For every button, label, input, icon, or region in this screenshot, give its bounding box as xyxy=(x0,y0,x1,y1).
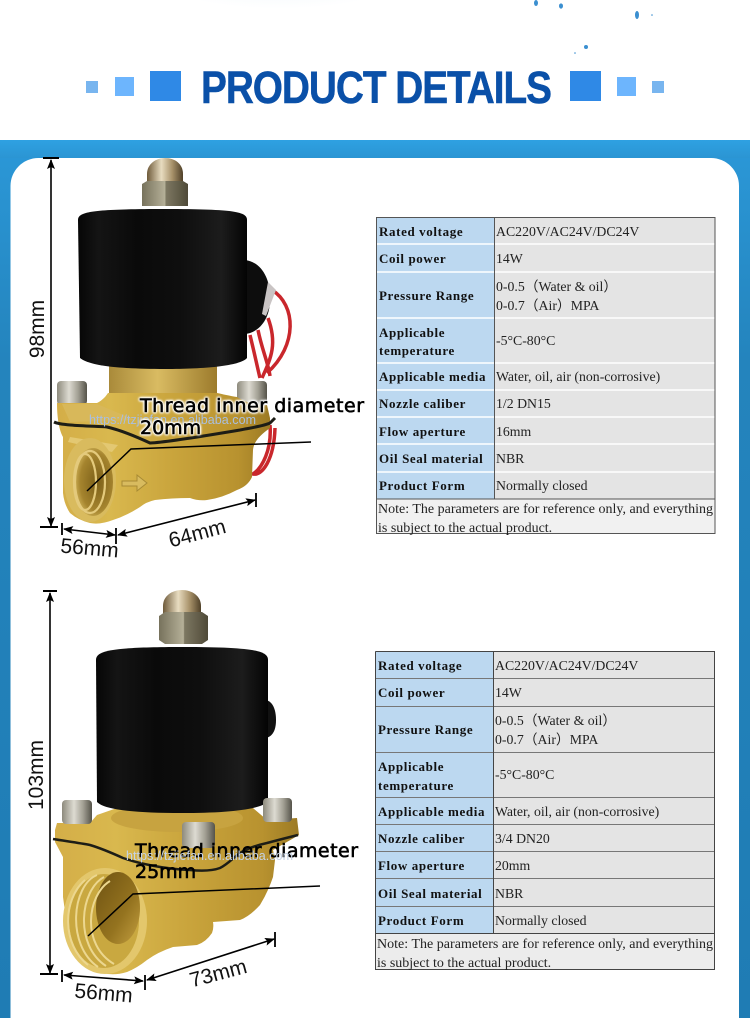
coil xyxy=(78,209,247,369)
row values: Water, oil, air (non-corrosive) xyxy=(496,369,660,385)
dimension label: 56mm: 56mm xyxy=(59,535,120,563)
water droplets xyxy=(534,0,653,54)
row lines xyxy=(375,678,715,906)
note: is subject to the actual product. xyxy=(378,521,552,536)
screws xyxy=(57,381,87,405)
row values: 16mm xyxy=(496,424,532,439)
row labels: temperature xyxy=(378,778,454,793)
row labels: Rated voltage xyxy=(379,224,463,239)
side knob xyxy=(266,700,276,738)
note xyxy=(377,937,713,971)
rubber seal xyxy=(53,835,298,871)
top casting xyxy=(111,804,243,832)
row labels: Coil power xyxy=(379,251,446,266)
row values: NBR xyxy=(495,886,524,901)
thread callout: 20mm: 20mm xyxy=(140,417,201,439)
row labels: Rated voltage xyxy=(378,658,462,673)
row labels: Nozzle caliber xyxy=(379,396,466,411)
brass neck xyxy=(109,360,217,398)
row labels xyxy=(379,224,486,493)
row labels: Product Form xyxy=(378,913,464,928)
row values: 0-0.5（Water & oil） xyxy=(496,279,617,294)
row labels: Applicable xyxy=(379,325,445,340)
spec table 1 xyxy=(376,217,715,536)
watermark: https://tzjiefan.en.alibaba.com xyxy=(126,849,293,863)
coil xyxy=(96,647,268,813)
row labels: Applicable media xyxy=(378,804,485,819)
inlet port xyxy=(64,438,116,522)
row labels: Product Form xyxy=(379,478,465,493)
boss ridge xyxy=(68,437,118,452)
spec table 2 xyxy=(375,651,715,971)
flow arrow mark xyxy=(122,475,147,491)
dimension label: 64mm: 64mm xyxy=(166,515,228,552)
dome nut xyxy=(147,158,183,184)
thread callout: 25mm xyxy=(88,840,358,936)
row values: Normally closed xyxy=(495,913,587,928)
row values: 14W xyxy=(496,251,523,266)
row values: AC220V/AC24V/DC24V xyxy=(496,224,639,239)
dimension label: 56mm: 56mm xyxy=(73,980,134,1008)
table backgrounds xyxy=(376,217,494,499)
rubber seal xyxy=(54,418,275,443)
thread callout: 20mm xyxy=(87,395,364,491)
row labels: Flow aperture xyxy=(379,424,466,439)
row labels xyxy=(378,658,485,928)
table backgrounds xyxy=(375,651,493,933)
row labels: Oil Seal material xyxy=(378,886,482,901)
dome nut xyxy=(163,590,201,616)
row labels: Oil Seal material xyxy=(379,451,483,466)
flange highlight xyxy=(62,404,135,422)
row lines xyxy=(376,244,715,472)
row values: AC220V/AC24V/DC24V xyxy=(495,658,638,673)
row labels: temperature xyxy=(379,343,455,358)
row values xyxy=(495,658,659,928)
row values: NBR xyxy=(496,451,525,466)
row values: 14W xyxy=(495,685,522,700)
row values: Water, oil, air (non-corrosive) xyxy=(495,804,659,820)
row labels: Nozzle caliber xyxy=(378,831,465,846)
note: Note: The parameters are for reference only, and everything xyxy=(377,937,713,952)
dimension label: 98mm: 98mm xyxy=(26,300,49,358)
product photo 1: small valve xyxy=(54,158,290,524)
brass body xyxy=(55,808,299,974)
icon: red wires xyxy=(250,290,290,474)
watermark: https://tzjiefan.en.alibaba.com xyxy=(89,413,256,427)
note xyxy=(378,502,713,536)
row labels: Coil power xyxy=(378,685,445,700)
dimension lines: large valve xyxy=(40,591,275,990)
thread callout: 25mm: 25mm xyxy=(135,861,196,883)
dimension label: 103mm: 103mm xyxy=(25,740,48,810)
row values: 0-0.5（Water & oil） xyxy=(495,713,616,728)
side connector xyxy=(245,260,270,334)
row labels: Pressure Range xyxy=(378,722,473,737)
row values xyxy=(496,224,660,493)
note: is subject to the actual product. xyxy=(377,956,551,971)
row values: 20mm xyxy=(495,858,531,873)
section heading: product details: PRODUCT DETAILS xyxy=(201,62,551,113)
row values: 0-0.7（Air）MPA xyxy=(495,732,598,747)
decorative top haze xyxy=(150,0,410,44)
row values: -5°C-80°C xyxy=(495,767,554,782)
row values: 1/2 DN15 xyxy=(496,396,551,411)
row labels: Applicable xyxy=(378,759,444,774)
row values: Normally closed xyxy=(496,478,588,493)
wire collar xyxy=(262,282,276,316)
row values: 3/4 DN20 xyxy=(495,831,550,846)
dimension label: 73mm: 73mm xyxy=(187,955,249,992)
thread callout: 25mm: Thread inner diameter xyxy=(134,840,358,862)
row values: -5°C-80°C xyxy=(496,333,555,348)
thread callout: 20mm: Thread inner diameter xyxy=(139,395,364,417)
inlet port xyxy=(63,868,147,974)
note: Note: The parameters are for reference only, and everything xyxy=(378,502,713,517)
screws xyxy=(62,800,92,824)
row values: 0-0.7（Air）MPA xyxy=(496,298,599,313)
product photo 2: large valve xyxy=(53,590,299,974)
row labels: Applicable media xyxy=(379,369,486,384)
brass body xyxy=(57,393,270,524)
row labels: Flow aperture xyxy=(378,858,465,873)
row labels: Pressure Range xyxy=(379,288,474,303)
dimension lines: small valve xyxy=(40,158,256,544)
